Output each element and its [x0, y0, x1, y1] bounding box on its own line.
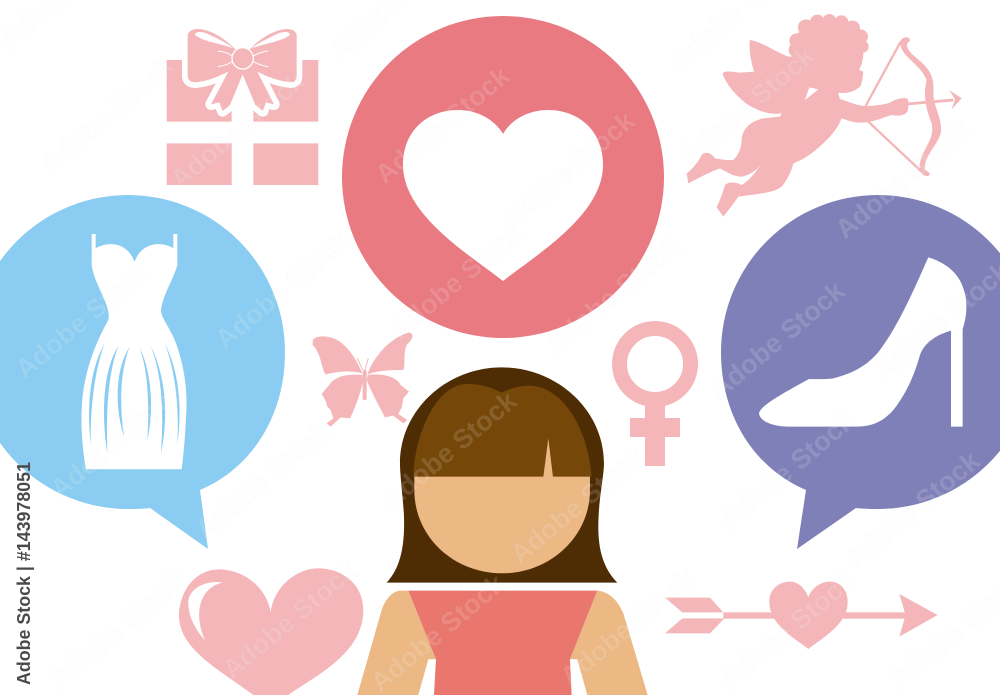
watermark pattern: Adobe Stock	[705, 275, 851, 405]
icon: gift box with bow	[167, 29, 318, 185]
watermark pattern: Adobe Stock	[715, 405, 861, 535]
panel: purple speech bubble with shoe	[721, 195, 1000, 549]
icon: white heart	[403, 110, 603, 281]
watermark pattern: Adobe Stock	[385, 215, 531, 345]
watermark pattern: Adobe Stock	[210, 225, 356, 355]
icon: butterfly	[313, 333, 412, 427]
watermark pattern: Adobe Stock	[505, 440, 651, 570]
icon: arrow through heart	[665, 582, 938, 649]
woman face	[414, 438, 590, 573]
icon: white high-heel shoe	[759, 257, 966, 427]
figure: woman	[357, 367, 648, 695]
stock id label: Adobe Stock | #143978051	[14, 462, 34, 685]
woman body	[357, 591, 648, 695]
watermark pattern: Adobe Stock	[495, 105, 641, 235]
watermark pattern: Adobe Stock	[370, 60, 516, 190]
watermark pattern: Adobe Stock	[840, 445, 986, 575]
panel: blue speech bubble with dress	[0, 195, 285, 549]
watermark pattern: Adobe Stock	[830, 115, 976, 245]
watermark pattern: Adobe Stock	[675, 40, 821, 170]
icon: female symbol	[620, 328, 690, 466]
watermark pattern: Adobe Stock	[715, 565, 861, 695]
watermark pattern: Adobe Stock	[217, 555, 363, 685]
watermark pattern: Adobe Stock	[165, 65, 311, 195]
panel: top heart circle	[342, 16, 664, 338]
icon: large pink heart	[179, 568, 363, 695]
woman hair	[387, 367, 617, 583]
watermark pattern: Adobe Stock	[365, 568, 511, 695]
watermark pattern: Adobe Stock	[377, 385, 523, 515]
watermark pattern: Adobe Stock	[45, 375, 191, 505]
icon: white dress	[81, 234, 187, 469]
watermark pattern: Adobe Stock	[540, 230, 686, 360]
watermark pattern: Adobe Stock	[35, 50, 181, 180]
watermark pattern: Adobe Stock	[45, 565, 191, 695]
watermark pattern: Adobe Stock	[10, 255, 156, 385]
icon: cupid with bow and arrow	[687, 14, 962, 217]
watermark pattern: Adobe Stock	[555, 562, 701, 692]
watermark pattern: Adobe Stock	[190, 415, 336, 545]
